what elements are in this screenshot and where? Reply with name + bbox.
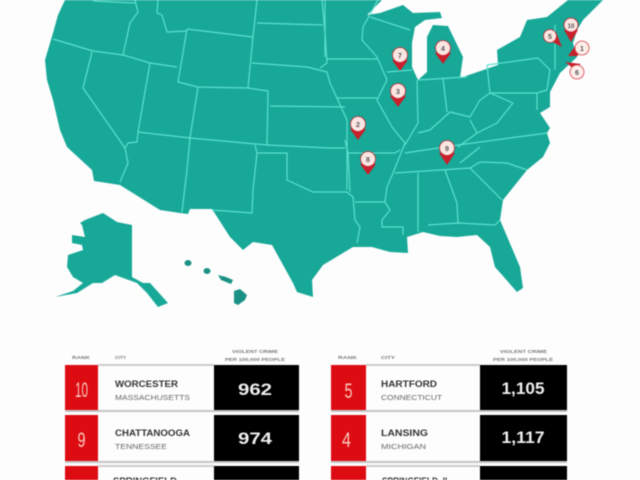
pin: rank 4	[435, 40, 451, 64]
row: rank 10 Worcester	[65, 364, 299, 412]
row: rank 10 Worcester: WORCESTER	[115, 379, 179, 389]
map: contiguous United States	[45, 0, 603, 297]
header: city: CITY	[115, 355, 126, 360]
pin: rank 3	[390, 84, 406, 107]
map pins	[350, 18, 589, 175]
row: rank 9 Chattanooga	[65, 415, 299, 463]
table: right column	[331, 349, 567, 480]
row: rank 5 Hartford: HARTFORD	[381, 379, 438, 389]
row: rank 4 Lansing: MICHIGAN	[381, 442, 426, 451]
table: left column	[65, 349, 299, 480]
pin: rank 8	[360, 152, 376, 175]
pin: rank 1	[568, 41, 589, 56]
row: rank 3	[331, 465, 567, 480]
pin: rank 7: 7	[398, 53, 402, 60]
row: rank 5 Hartford: 5	[344, 380, 352, 403]
header: violent crime rate: VIOLENT CRIME	[232, 349, 278, 354]
row: rank 4 Lansing: LANSING	[381, 428, 428, 438]
pin: rank 1: 1	[580, 46, 584, 53]
row: rank 4 Lansing	[331, 415, 567, 463]
row: rank 9 Chattanooga: CHATTANOOGA	[115, 428, 191, 438]
pin: rank 4: 4	[441, 46, 445, 53]
pin: rank 6	[565, 62, 584, 79]
row: rank 8	[65, 465, 299, 480]
pin: rank 10: 10	[568, 24, 575, 30]
pin: rank 2: 2	[356, 122, 360, 129]
pin: rank 6: 6	[575, 70, 579, 77]
row: rank 5 Hartford: 1,105	[502, 379, 544, 398]
map: Alaska	[55, 213, 168, 307]
header: violent crime rate: PER 100,000 PEOPLE	[225, 357, 285, 362]
header: city: CITY	[381, 355, 395, 360]
header: rank: RANK	[72, 355, 91, 360]
row: rank 10 Worcester: 10	[75, 379, 88, 402]
row: rank 5 Hartford: CONNECTICUT	[381, 393, 442, 402]
row: rank 4 Lansing: 4	[342, 429, 351, 452]
state borders	[53, 0, 555, 243]
row: rank 10 Worcester: MASSACHUSETTS	[115, 393, 190, 402]
pin: rank 5	[544, 30, 562, 47]
row: rank 10 Worcester: 962	[238, 380, 272, 399]
row: rank 9 Chattanooga: TENNESSEE	[115, 442, 167, 451]
pin: rank 2	[350, 116, 366, 140]
pin: rank 8: 8	[366, 157, 370, 164]
row: rank 5 Hartford	[331, 364, 567, 412]
pin: rank 10	[564, 18, 578, 42]
pin: rank 9	[439, 140, 455, 165]
pin: rank 7	[392, 48, 408, 71]
header: violent crime rate: PER 100,000 PEOPLE	[493, 357, 553, 362]
pin: rank 5: 5	[548, 34, 552, 41]
map: Hawaii	[184, 260, 247, 305]
row: rank 4 Lansing: 1,117	[502, 428, 544, 447]
pin: rank 9: 9	[445, 146, 449, 153]
row: rank 9 Chattanooga: 9	[78, 429, 86, 452]
header: rank: RANK	[338, 355, 358, 360]
header: violent crime rate: VIOLENT CRIME	[500, 349, 547, 354]
row: rank 9 Chattanooga: 974	[238, 429, 273, 448]
pin: rank 3: 3	[396, 89, 400, 96]
